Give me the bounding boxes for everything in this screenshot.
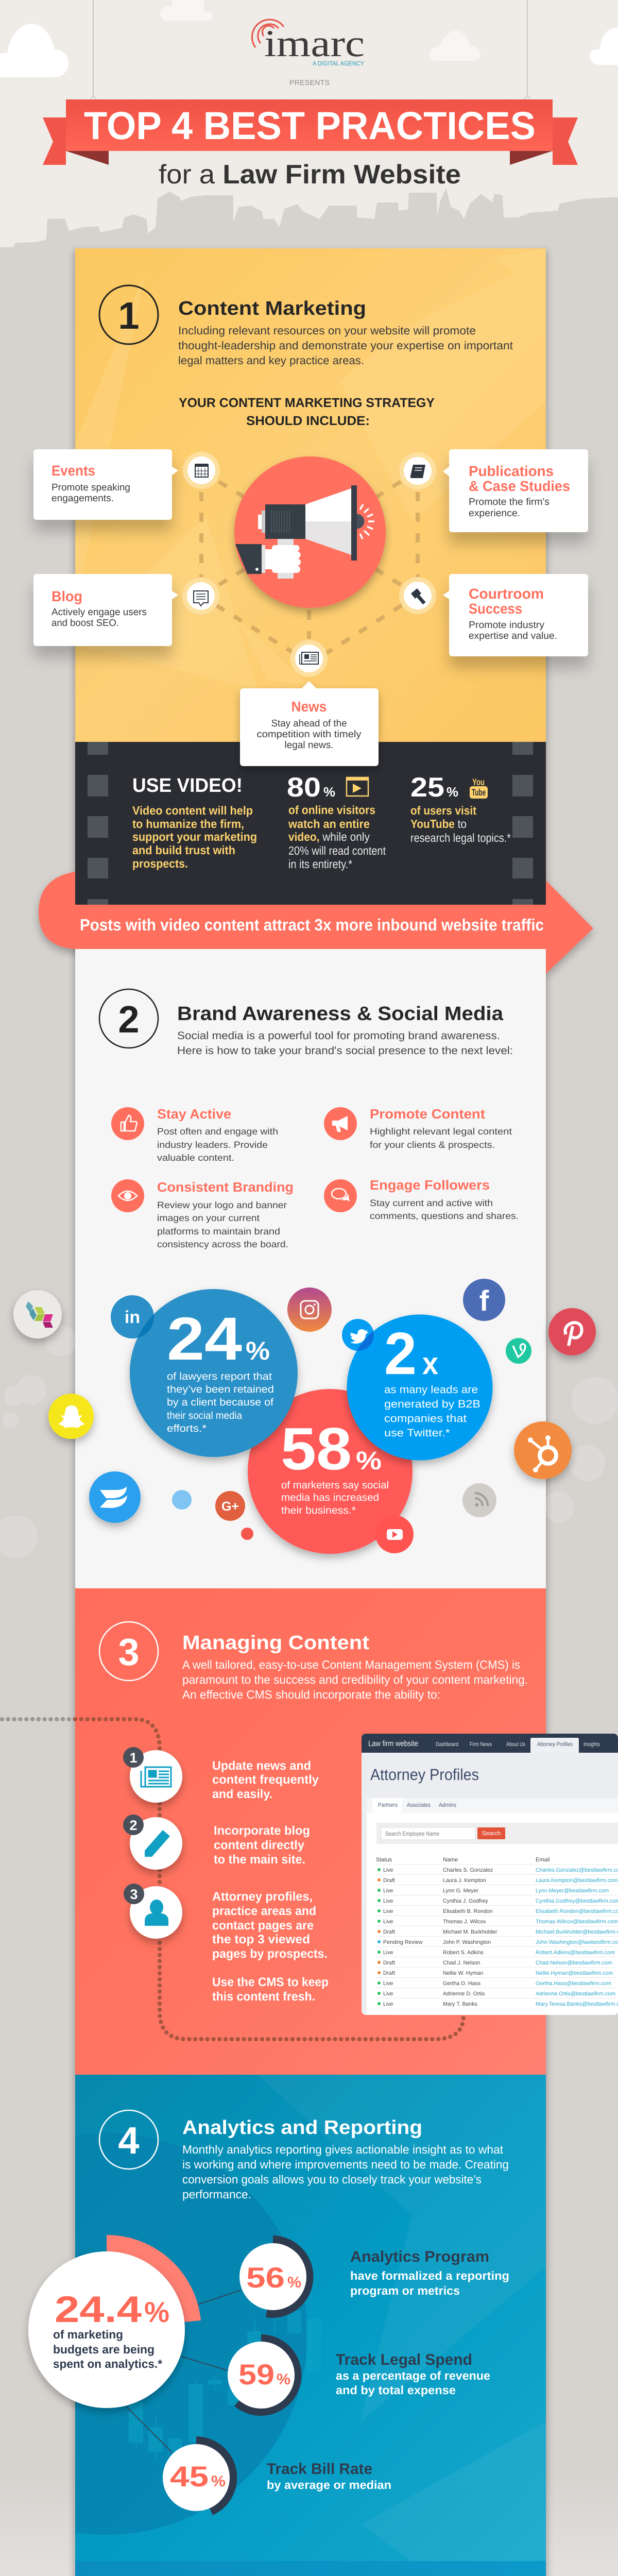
cms screenshot: Pending Review — [383, 1939, 423, 1945]
subtitle: for a Law Firm Website — [159, 160, 461, 190]
card: blog: Actively engage users — [52, 607, 147, 618]
stat: 56 percent: % — [287, 2274, 301, 2291]
icon: blog speech bubble — [182, 578, 219, 615]
stat 25 percent: 25 — [410, 772, 444, 803]
text: analytics program: have formalized a reporting — [350, 2269, 509, 2282]
stat 80 percent: 20% will read content — [288, 844, 386, 857]
card: courtroom success: Promote industry — [469, 620, 544, 631]
heading: Managing Content — [182, 1632, 369, 1654]
stat: 45 percent: % — [211, 2473, 226, 2490]
stat: 45 percent: 45 — [170, 2460, 209, 2493]
logo: imarc: imarc — [264, 23, 365, 65]
card: courtroom success: Courtroom — [469, 586, 544, 602]
stat 25 percent: research legal topics.* — [410, 831, 511, 844]
stat bubble: 2x: companies that — [384, 1413, 467, 1425]
cms screenshot: Attorney Profiles — [370, 1766, 479, 1784]
candlestick chart background — [129, 2306, 321, 2460]
video copy: prospects. — [132, 857, 188, 870]
intro text: Including relevant resources on your website will promote — [178, 324, 476, 337]
intro text: Here is how to take your brand's social presence to the next level: — [177, 1045, 513, 1057]
card: news: Stay ahead of the — [271, 718, 347, 729]
step 3: Use the CMS to keep — [212, 1975, 329, 1989]
tip: consistent branding: images on your current — [157, 1213, 260, 1223]
tip: engage followers: comments, questions and shares. — [370, 1211, 519, 1221]
card: news: News — [291, 699, 327, 715]
card: publications and case studies: experience. — [469, 508, 520, 519]
cms screenshot: Draft — [383, 1877, 395, 1884]
step 3 — [124, 1884, 329, 2004]
text: track bill rate — [267, 2461, 391, 2492]
cms screenshot: Cynthia.Godfrey@bestlawfirm.com — [536, 1898, 618, 1904]
card: events: Events — [52, 463, 95, 479]
text: track bill rate: by average or median — [267, 2478, 391, 2492]
cms screenshot: Draft — [383, 1960, 395, 1966]
cms screenshot: Firm News — [470, 1741, 492, 1748]
icon: megaphone in circle — [234, 456, 386, 608]
heading use video: USE VIDEO! — [132, 775, 243, 796]
step 2: content directly — [214, 1838, 305, 1852]
card: courtroom success: expertise and value. — [469, 631, 557, 641]
title ribbon: TOP 4 BEST PRACTICES — [84, 104, 536, 148]
cms screenshot: Attorney Profiles — [537, 1741, 573, 1748]
strategy heading: SHOULD INCLUDE: — [246, 414, 370, 428]
cms screenshot: About Us — [506, 1741, 525, 1748]
text: analytics program: Analytics Program — [350, 2248, 489, 2265]
cms screenshot: Live — [383, 1991, 393, 1997]
cms screenshot: Draft — [383, 1929, 395, 1935]
stat bubble: 58 percent: % — [356, 1446, 382, 1475]
panel: content marketing — [75, 248, 546, 742]
icon: partner logo ball — [13, 1290, 62, 1338]
tip: stay active — [111, 1106, 278, 1163]
step 3: this content fresh. — [212, 1990, 315, 2004]
step 1: content frequently — [212, 1773, 319, 1787]
card: blog — [33, 574, 178, 646]
icon: google plus: G+ — [221, 1499, 239, 1514]
card: events: engagements. — [52, 493, 114, 504]
panel: managing content — [75, 1588, 546, 2075]
stat 80 percent: in its entirety.* — [288, 857, 352, 871]
cms screenshot: Laura J. Kempton — [443, 1877, 486, 1884]
stat: 24.4 percent — [28, 2235, 201, 2408]
step 2: Incorporate blog — [214, 1824, 310, 1838]
decorative dot: light blue — [172, 1490, 192, 1510]
card: news: legal news. — [284, 740, 334, 751]
icon: twitter — [342, 1319, 374, 1351]
stat bubble: 2x: x — [422, 1346, 438, 1381]
step 1: 1 — [129, 1750, 138, 1766]
cms screenshot: Adrienne.Ortis@bestlawfirm.com — [536, 1991, 615, 1997]
video copy: to humanize the firm, — [132, 817, 244, 831]
tip: engage followers: Engage Followers — [370, 1177, 490, 1193]
card: publications and case studies — [443, 449, 588, 532]
card: events: Promote speaking — [52, 482, 130, 493]
intro text: Monthly analytics reporting gives actionable insight as to what — [182, 2143, 504, 2156]
stat: 24.4 percent: of marketing — [53, 2328, 123, 2341]
section number 4 — [99, 2110, 158, 2169]
stat bubble: 58 percent: of marketers say social — [281, 1480, 389, 1491]
cms screenshot: Live — [383, 1898, 393, 1904]
dashed connectors — [201, 482, 418, 654]
video copy: support your marketing — [132, 830, 257, 843]
card: events — [33, 449, 178, 520]
stat bubble: 2x: as many leads are — [384, 1384, 478, 1396]
section number 3 — [99, 1622, 158, 1681]
cms screenshot: Search — [482, 1831, 501, 1837]
cms screenshot: Email — [536, 1857, 550, 1863]
video copy: and build trust with — [132, 843, 235, 857]
intro text: An effective CMS should incorporate the ability to: — [182, 1688, 440, 1701]
intro text: Social media is a powerful tool for promoting brand awareness. — [177, 1030, 500, 1042]
card: blog: Blog — [52, 588, 82, 604]
tip: consistent branding: Consistent Branding — [157, 1179, 294, 1195]
stat bubble: 24 percent: of lawyers report that — [167, 1371, 272, 1382]
heading: Content Marketing — [178, 298, 366, 319]
intro text — [178, 324, 513, 367]
stat: 24.4 percent: % — [144, 2296, 169, 2328]
card: publications and case studies: Promote the firm's — [469, 497, 550, 507]
cms screenshot: Laura.Kempton@bestlawfirm.com — [536, 1877, 618, 1884]
cms screenshot: Search Employee Name — [385, 1831, 439, 1837]
card: blog: and boost SEO. — [52, 618, 119, 629]
text: track bill rate: Track Bill Rate — [267, 2461, 372, 2478]
cms screenshot: Live — [383, 1919, 393, 1925]
cms screenshot: Charles S. Gonzalez — [443, 1867, 493, 1873]
logo: imarc — [252, 20, 365, 67]
icon: facebook: f — [479, 1284, 489, 1317]
stat bubble: 24 percent: % — [246, 1336, 270, 1365]
stat 25 percent: % — [447, 784, 458, 800]
card: publications and case studies: Publications — [469, 463, 554, 479]
tip: stay active: valuable content. — [157, 1153, 234, 1163]
step 1: and easily. — [212, 1787, 272, 1801]
icon: wistia — [89, 1471, 141, 1523]
cms screenshot: John P. Washington — [443, 1939, 491, 1945]
stat 25 percent: YouTube to — [410, 817, 467, 831]
cms screenshot: Name — [443, 1857, 458, 1863]
panel: analytics and reporting — [75, 2075, 546, 2576]
city skyline — [0, 188, 618, 268]
intro text: thought-leadership and demonstrate your expertise on important — [178, 339, 513, 352]
icon: youtube — [375, 1515, 414, 1553]
section number 4: 4 — [118, 2119, 140, 2162]
stat 80 percent: 80 — [287, 772, 321, 803]
title ribbon — [43, 99, 578, 165]
intro text — [182, 1658, 528, 1701]
text: track legal spend: and by total expense — [336, 2383, 456, 2397]
video copy: Video content will help — [132, 804, 253, 817]
cms screenshot: Partners — [378, 1802, 398, 1808]
stat bubble: 24 percent: efforts.* — [167, 1423, 207, 1434]
dotted path — [2, 1719, 464, 2039]
icon: newspaper — [290, 640, 328, 677]
cms screenshot: Chad J. Nelson — [443, 1960, 480, 1966]
cms screenshot: Admins — [439, 1802, 456, 1808]
tip: consistent branding — [111, 1179, 294, 1249]
stat: 24.4 percent: budgets are being — [53, 2343, 154, 2356]
text: track legal spend: as a percentage of revenue — [336, 2369, 490, 2382]
step 3: Attorney profiles, — [212, 1890, 313, 1904]
icon: snapchat — [48, 1394, 94, 1439]
banner text: Posts with video content attract 3x more inbound website traffic — [80, 916, 544, 934]
stat: 56 percent: 56 — [246, 2261, 285, 2294]
intro text — [182, 2143, 509, 2201]
step 1 — [123, 1747, 319, 1803]
tip: consistent branding: platforms to maintain brand — [157, 1226, 280, 1236]
stat 25 percent: of users visit — [410, 804, 476, 817]
cms screenshot: Draft — [383, 1970, 395, 1976]
cms screenshot: Nellie.Hyman@bestlawfirm.com — [536, 1970, 613, 1976]
stat bubble: 24 percent: their social media — [167, 1410, 243, 1421]
cms screenshot: Live — [383, 1867, 393, 1873]
step 1: Update news and — [212, 1759, 311, 1773]
stat bubble: 58 percent: 58 — [281, 1415, 352, 1482]
heading: Analytics and Reporting — [182, 2117, 422, 2139]
tip: promote content — [324, 1106, 512, 1150]
cms screenshot: Mary T. Banks — [443, 2001, 477, 2007]
section number 2: 2 — [118, 998, 140, 1041]
stat 80 percent: of online visitors — [288, 803, 375, 817]
tip: consistent branding: Review your logo and banner — [157, 1200, 287, 1210]
icon: instagram — [287, 1287, 332, 1332]
cms screenshot: Nellie W. Hyman — [443, 1970, 483, 1976]
strategy heading: YOUR CONTENT MARKETING STRATEGY — [179, 396, 435, 410]
icon: pinterest — [548, 1308, 596, 1355]
strategy heading — [179, 396, 435, 428]
text: track legal spend — [336, 2351, 490, 2397]
column shadow — [74, 250, 547, 2576]
card: news — [240, 681, 379, 766]
cms screenshot: Live — [383, 1888, 393, 1894]
stat: 59 percent — [228, 2334, 301, 2416]
tip: stay active: Stay Active — [157, 1106, 231, 1122]
text: analytics program: program or metrics — [350, 2284, 460, 2297]
icon: book — [399, 452, 436, 489]
step 3: practice areas and — [212, 1904, 316, 1918]
connector lines — [127, 2290, 241, 2452]
stat bubble: 2x: 2 — [384, 1320, 417, 1387]
card: news: competition with timely — [256, 729, 362, 740]
tip: consistent branding: consistency across the board. — [157, 1239, 288, 1249]
cms screenshot: Live — [383, 1980, 393, 1987]
stat bubble: 24 percent: 24 — [167, 1305, 242, 1373]
cms screenshot: Live — [383, 2001, 393, 2007]
tip: promote content: Promote Content — [370, 1106, 485, 1122]
stat: 45 percent — [163, 2436, 237, 2515]
cms screenshot: Status — [376, 1857, 392, 1863]
section number 1 — [99, 285, 158, 344]
icon: vine — [506, 1338, 531, 1364]
icon: hubspot — [514, 1421, 572, 1479]
logo: imarc: A DIGITAL AGENCY — [313, 60, 364, 67]
cms screenshot — [362, 1734, 618, 2015]
tip: stay active: industry leaders. Provide — [157, 1140, 268, 1150]
panel: brand awareness and social media — [75, 949, 546, 1588]
stat 25 percent: Tube — [472, 787, 486, 798]
section number 2 — [99, 989, 158, 1048]
banner: video traffic ribbon — [39, 872, 593, 974]
bokeh decoration — [0, 1326, 618, 1558]
tip: promote content: Highlight relevant legal content — [370, 1126, 512, 1137]
stat 25 percent — [410, 772, 511, 844]
cms screenshot: Insights — [583, 1741, 600, 1748]
text: analytics program — [350, 2248, 509, 2297]
stat 25 percent: You — [472, 777, 485, 787]
stat bubble: 2x: use Twitter.* — [384, 1427, 450, 1439]
intro text: performance. — [182, 2188, 251, 2201]
step 2: to the main site. — [214, 1853, 305, 1867]
stat bubble: 58 percent: their business.* — [281, 1505, 356, 1516]
icon: calendar — [183, 452, 220, 489]
stat: 59 percent: % — [277, 2371, 290, 2388]
stat 80 percent: watch an entire — [288, 817, 370, 831]
stat: 59 percent: 59 — [238, 2358, 274, 2391]
cms screenshot: Cynthia J. Godfrey — [443, 1898, 488, 1904]
step 3: the top 3 viewed — [212, 1933, 310, 1946]
stat bubble: 58 percent — [248, 1389, 413, 1554]
presents label: PRESENTS — [289, 78, 330, 87]
cms screenshot: Gertha D. Hass — [443, 1980, 480, 1987]
stat bubble: 2x — [347, 1315, 492, 1460]
intro text: A well tailored, easy-to-use Content Management System (CMS) is — [182, 1658, 520, 1671]
intro text: paramount to the success and credibility of your content marketing. — [182, 1673, 528, 1686]
tip: promote content: for your clients & prospects. — [370, 1140, 495, 1150]
panel: use video — [75, 742, 546, 905]
icon: google plus — [215, 1491, 245, 1521]
intro text: conversion goals allows you to closely track your website’s — [182, 2173, 482, 2186]
step 3: 3 — [130, 1887, 138, 1902]
cms screenshot: Chad.Nelson@bestlawfirm.com — [536, 1960, 612, 1966]
step 2: 2 — [129, 1818, 138, 1833]
cms screenshot: Dashboard — [436, 1741, 458, 1748]
cms screenshot: Michael M. Burkholder — [443, 1929, 497, 1935]
stat bubble: 24 percent: they’ve been retained — [167, 1384, 274, 1395]
stat 80 percent — [287, 772, 386, 871]
card: publications and case studies: & Case Studies — [469, 478, 570, 494]
intro text: is working and where improvements need to be made. Creating — [182, 2158, 509, 2171]
cms screenshot: Thomas.Wilcox@bestlawfirm.com — [536, 1919, 618, 1925]
film strip holes — [88, 742, 533, 905]
icon: facebook — [463, 1279, 505, 1321]
card: courtroom success — [443, 574, 588, 656]
cms screenshot: Gertha.Hass@bestlawfirm.com — [536, 1980, 611, 1987]
cms screenshot: Robert.Adkins@bestlawfirm.com — [536, 1950, 615, 1956]
stat bubble: 24 percent — [130, 1289, 298, 1457]
intro text — [177, 1030, 513, 1057]
cms screenshot: Law firm website — [368, 1739, 418, 1748]
decorative dot: red — [241, 1528, 253, 1540]
step 3: contact pages are — [212, 1919, 314, 1933]
tip: stay active: Post often and engage with — [157, 1126, 278, 1137]
cms screenshot: Live — [383, 1908, 393, 1914]
stat: 24.4 percent: 24.4 — [55, 2289, 142, 2330]
tip: engage followers: Stay current and active with — [370, 1198, 493, 1208]
stat bubble: 24 percent: by a client because of — [167, 1397, 273, 1408]
heading: Brand Awareness & Social Media — [177, 1003, 504, 1025]
section number 1: 1 — [118, 294, 140, 337]
stat: 56 percent — [239, 2235, 314, 2318]
cms screenshot: Adrienne D. Ortis — [443, 1991, 485, 1997]
cms screenshot: Live — [383, 1950, 393, 1956]
icon: linkedin: in — [125, 1308, 140, 1327]
cms screenshot: Lynn G. Meyer — [443, 1888, 479, 1894]
cms screenshot: Lynn.Meyer@bestlawfirm.com — [536, 1888, 609, 1894]
section number 3: 3 — [118, 1631, 140, 1673]
stat bubble: 2x: generated by B2B — [384, 1398, 480, 1410]
stat 80 percent: video, while only — [288, 830, 370, 843]
icon: gavel — [399, 577, 436, 614]
cms screenshot: Elisabeth B. Rondon — [443, 1908, 493, 1914]
text: track legal spend: Track Legal Spend — [336, 2351, 472, 2368]
tip: engage followers — [324, 1177, 519, 1221]
intro text: legal matters and key practice areas. — [178, 354, 364, 367]
icon: linkedin — [111, 1295, 154, 1338]
cms screenshot: Thomas J. Wilcox — [443, 1919, 486, 1925]
card: courtroom success: Success — [469, 601, 522, 617]
video copy — [132, 804, 257, 870]
stat 80 percent: % — [323, 784, 335, 800]
icon: rss — [462, 1483, 496, 1517]
stat: 24.4 percent: spent on analytics.* — [53, 2357, 162, 2370]
step 3: pages by prospects. — [212, 1947, 328, 1961]
stat bubble: 58 percent: media has increased — [281, 1492, 379, 1503]
cms screenshot: Associates — [407, 1802, 431, 1808]
cms screenshot: Robert S. Adkins — [443, 1950, 484, 1956]
step 2 — [123, 1815, 310, 1870]
